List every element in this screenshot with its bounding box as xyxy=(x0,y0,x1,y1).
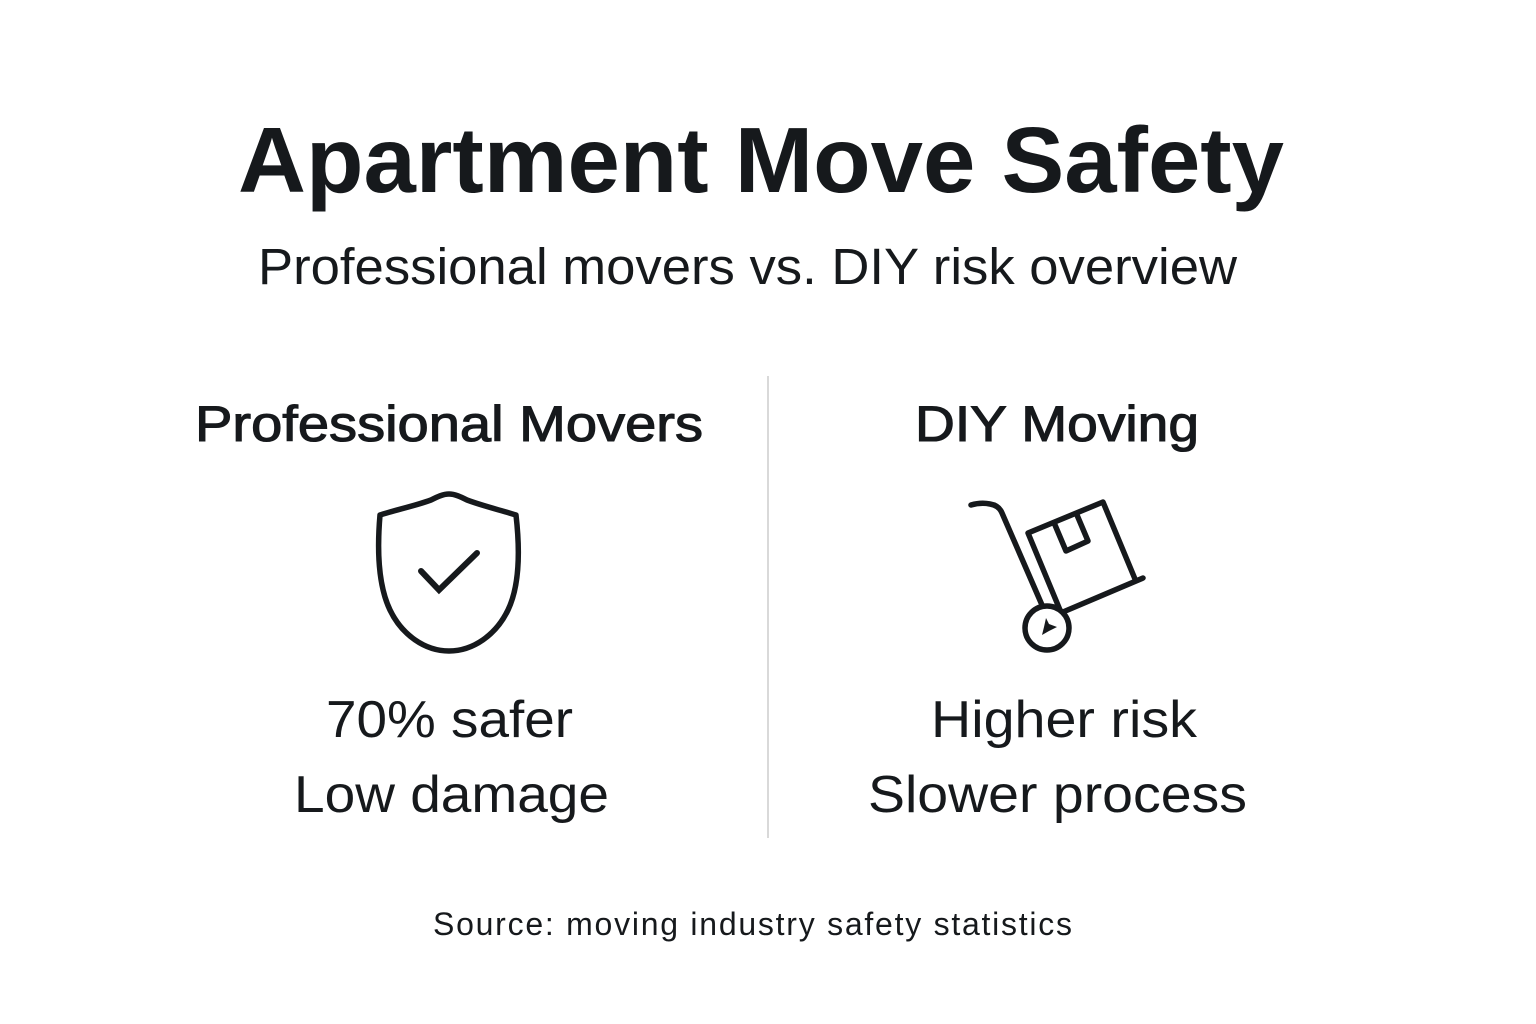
heading: professional movers: Professional Movers xyxy=(195,396,703,452)
heading: diy moving: DIY Moving xyxy=(915,396,1199,452)
source note: Source: moving industry safety statistics xyxy=(433,906,1072,942)
stat: 70% safer: 70% safer xyxy=(326,691,573,749)
icon: hand truck with box xyxy=(971,502,1143,650)
stat: low damage: Low damage xyxy=(294,766,609,824)
title: Apartment Move Safety xyxy=(238,108,1284,212)
stat: higher risk: Higher risk xyxy=(931,691,1198,749)
subtitle: Professional movers vs. DIY risk overview xyxy=(258,238,1237,295)
icon: shield with check xyxy=(379,494,518,651)
panel: professional movers xyxy=(195,396,703,824)
divider xyxy=(767,376,769,838)
stat: slower process: Slower process xyxy=(868,766,1247,824)
panel: diy moving xyxy=(868,396,1247,824)
